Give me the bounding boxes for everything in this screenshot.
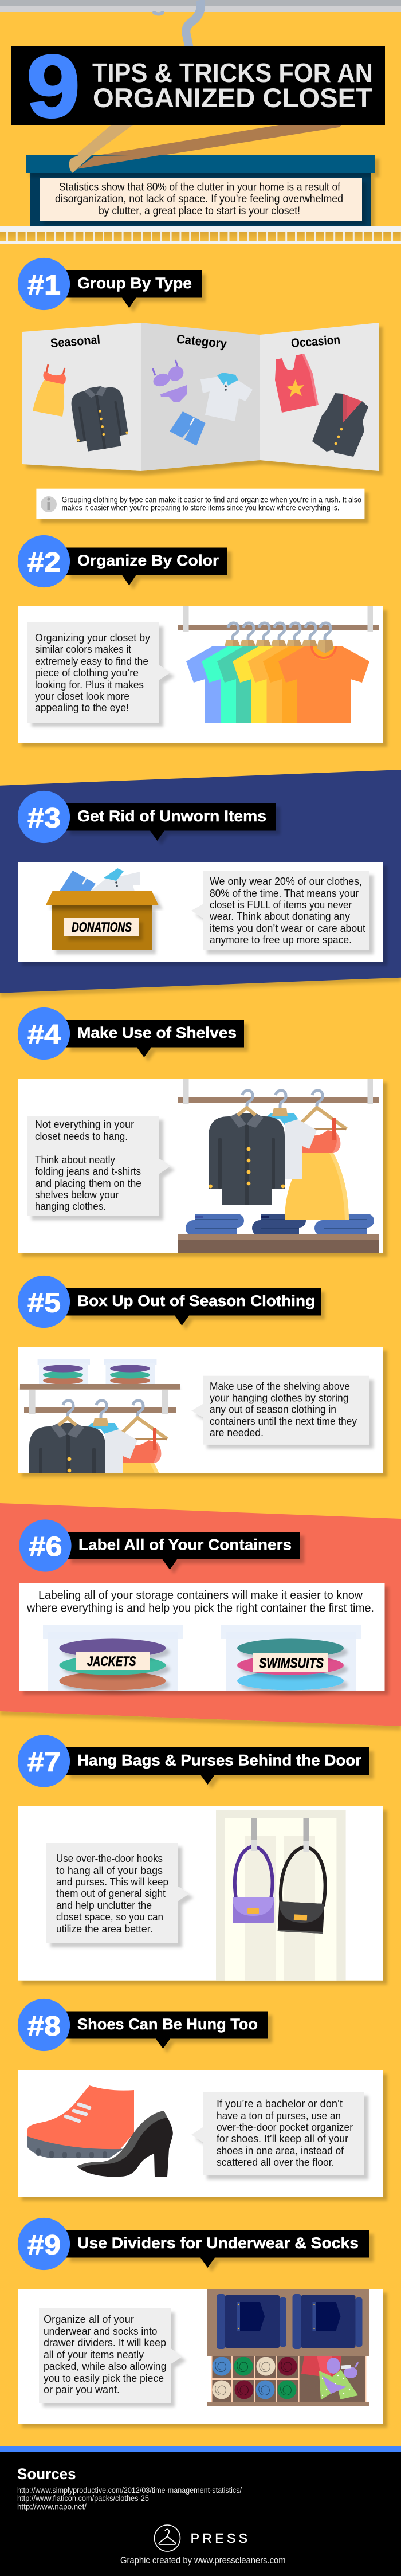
callout: [27, 622, 171, 723]
fold: category: [141, 323, 260, 471]
icon: info: [41, 496, 57, 512]
sources heading: Sources: [17, 2465, 76, 2483]
hanging clothes: [29, 1399, 168, 1473]
callout: looking for. Plus it makes: [35, 679, 144, 691]
callout: [191, 2092, 364, 2175]
callout: for shoes. It’ll keep all of your: [217, 2133, 348, 2144]
container: swimsuits: [221, 1625, 361, 1691]
callout: extremely easy to find the: [35, 656, 148, 667]
heading: #4: Make Use of Shelves: [77, 1024, 237, 1041]
heading: #1: #1: [27, 270, 61, 300]
callout: [46, 1843, 190, 1943]
callout: you to easily pick the piece: [44, 2373, 164, 2384]
heading: #3: #3: [27, 803, 61, 833]
callout: drawer dividers. It will keep: [44, 2337, 166, 2348]
source links: http://www.flaticon.com/packs/clothes-25: [17, 2493, 149, 2503]
panel: label containers: Labeling all of your storage containers will make it easier to know: [38, 1589, 363, 1602]
container: swimsuits: SWIMSUITS: [259, 1656, 324, 1671]
logo: press: PRESS: [191, 2531, 247, 2546]
panel: label containers: where everything is and help you pick the right container the first time.: [26, 1602, 374, 1615]
door with hooks and bags: [216, 1810, 346, 1981]
heading: #7: [18, 1735, 369, 1787]
underwear pile: [301, 2356, 358, 2400]
callout: shoes in one area, instead of: [217, 2145, 344, 2157]
callout: 80% of the time. That means your: [210, 888, 359, 899]
fold: occasion: [260, 323, 379, 471]
panel: folded groups: [22, 323, 379, 471]
callout: have a ton of purses, use an: [217, 2110, 341, 2122]
heading: #9: [18, 2218, 369, 2270]
logo: press: [155, 2525, 247, 2551]
callout: Use over-the-door hooks: [56, 1853, 163, 1864]
callout: shelves below your: [35, 1189, 119, 1201]
band: navy section: [0, 770, 401, 993]
heading: #9: #9: [27, 2230, 61, 2260]
heading: #8: #8: [27, 2012, 61, 2041]
note: grouping: Grouping clothing by type can make it easier to find and organize when you’re in a rush. It also: [62, 496, 361, 504]
callout: items you don’t wear or care about: [210, 923, 365, 934]
fold: category: Category: [176, 332, 228, 351]
heading: #2: #2: [27, 548, 61, 578]
callout: to hang all of your bags: [56, 1865, 163, 1876]
callout: [39, 2308, 182, 2403]
shelf rail: [0, 226, 401, 244]
heading: #6: #6: [29, 1532, 62, 1562]
callout: wear. Think about donating any: [209, 911, 350, 922]
purple bag: [233, 1818, 274, 1923]
callout: Think about neatly: [35, 1154, 115, 1166]
heading: #6: Label All of Your Containers: [78, 1536, 292, 1553]
container: jackets: JACKETS: [87, 1654, 136, 1669]
callout: Organizing your closet by: [35, 632, 150, 644]
callout: appealing to the eye!: [35, 702, 129, 713]
callout: piece of clothing you’re: [35, 667, 139, 679]
callout: folding jeans and t-shirts: [35, 1166, 141, 1177]
black bag: [278, 1818, 325, 1934]
note: grouping: [36, 489, 364, 519]
panel: unworn items: [18, 862, 383, 962]
rack of colored shirts: [178, 606, 379, 723]
heading: #5: #5: [27, 1288, 61, 1318]
heading: #1: Group By Type: [77, 275, 192, 292]
title: 9: [26, 37, 80, 136]
callout: your hanging clothes by storing: [210, 1393, 348, 1404]
callout: and help unclutter the: [56, 1900, 152, 1911]
folded jeans: [186, 1214, 374, 1236]
title: [11, 37, 385, 136]
panel: label containers: [19, 1583, 385, 1691]
heading: #7: Hang Bags & Purses Behind the Door: [77, 1751, 362, 1769]
heading: #3: Get Rid of Unworn Items: [77, 807, 266, 825]
credit: Graphic created by www.presscleaners.com: [120, 2555, 286, 2566]
heading: #7: #7: [27, 1747, 61, 1778]
panel: organize by color: [18, 606, 383, 743]
closet rack with hanging clothes: [178, 1079, 379, 1253]
wooden hanger arms: [69, 125, 341, 173]
callout: underwear and socks into: [44, 2326, 157, 2337]
storage containers on shelf: [20, 1359, 180, 1414]
title: ORGANIZED CLOSET: [93, 83, 372, 113]
heading: #5: Box Up Out of Season Clothing: [77, 1292, 315, 1309]
callout: over-the-door pocket organizer: [217, 2122, 353, 2133]
heading: #9: Use Dividers for Underwear & Socks: [77, 2234, 359, 2252]
callout: are needed.: [210, 1427, 264, 1438]
donation box: DONATIONS: [72, 920, 132, 935]
callout: closet needs to hang.: [35, 1131, 128, 1142]
panel: shelves: [18, 1079, 383, 1253]
heading: #3: [18, 791, 276, 843]
callout: We only wear 20% of our clothes,: [210, 876, 362, 887]
callout: scattered all over the floor.: [217, 2157, 335, 2168]
callout: any out of season clothing in: [210, 1404, 336, 1416]
heading: #2: [18, 535, 227, 587]
heading: #4: [18, 1007, 244, 1060]
icon: boot: [27, 2085, 134, 2158]
fold: seasonal: Seasonal: [50, 332, 101, 350]
donation box: [46, 868, 159, 950]
heading: #1: [18, 258, 202, 310]
fold: seasonal: [22, 323, 141, 471]
callout: [191, 871, 369, 950]
band: coral section: [0, 1503, 401, 1726]
callout: and placing them on the: [35, 1178, 141, 1189]
intro box with shelf: by clutter, a great place to start is your closet!: [99, 205, 300, 217]
callout: If you’re a bachelor or don’t: [217, 2098, 343, 2110]
callout: Organize all of your: [44, 2314, 134, 2325]
title: TIPS & TRICKS FOR AN: [92, 58, 373, 88]
callout: hanging clothes.: [35, 1201, 106, 1212]
callout: Not everything in your: [35, 1119, 134, 1130]
intro box with shelf: disorganization, not lack of space. If you’re feeling overwhelmed: [55, 193, 343, 205]
callout: closet space, so you can: [56, 1911, 163, 1923]
heading: #6: [19, 1519, 300, 1572]
callout: Make use of the shelving above: [210, 1381, 350, 1392]
note: grouping: makes it easier when you’re preparing to store items since you know where everything is.: [62, 504, 339, 512]
heading: #5: [18, 1276, 321, 1328]
callout: anymore to free up more space.: [210, 934, 352, 946]
source links: http://www.napo.net/: [17, 2502, 87, 2511]
fold: occasion: Occasion: [290, 332, 341, 350]
heading: #8: Shoes Can Be Hung Too: [77, 2016, 258, 2033]
source links: [17, 2485, 242, 2511]
rolled socks: [212, 2357, 297, 2399]
callout: your closet look more: [35, 691, 129, 702]
callout: similar colors makes it: [35, 644, 131, 655]
dresser with jeans and drawer: [207, 2289, 369, 2406]
panel: bags behind door: [18, 1806, 383, 1981]
panel: season clothing: [18, 1347, 388, 1479]
callout: all of your items neatly: [44, 2349, 144, 2361]
callout: [191, 1376, 369, 1445]
heading: #8: [18, 1999, 268, 2051]
callout: utilize the area better.: [56, 1923, 152, 1935]
panel: shoes: [18, 2070, 383, 2197]
callout: closet is FULL of items you never: [210, 899, 352, 911]
intro box with shelf: [26, 155, 375, 226]
icon: high heel: [77, 2111, 173, 2177]
callout: packed, while also allowing: [44, 2361, 167, 2372]
intro box with shelf: Statistics show that 80% of the clutter in your home is a result of: [59, 182, 341, 194]
callout: [27, 1116, 171, 1216]
callout: containers until the next time they: [210, 1416, 357, 1427]
callout: and purses. This will keep: [56, 1876, 168, 1888]
footer: [0, 2446, 401, 2576]
container: jackets: [43, 1625, 183, 1691]
callout: or pair you want.: [44, 2384, 120, 2395]
heading: #4: #4: [27, 1020, 61, 1050]
heading: #2: Organize By Color: [77, 552, 219, 569]
panel: dividers: [18, 2289, 383, 2424]
source links: http://www.simplyproductive.com/2012/03/time-management-statistics/: [17, 2485, 242, 2495]
callout: them out of general sight: [56, 1888, 166, 1899]
header: closet rod and hanger hook: [0, 0, 401, 47]
